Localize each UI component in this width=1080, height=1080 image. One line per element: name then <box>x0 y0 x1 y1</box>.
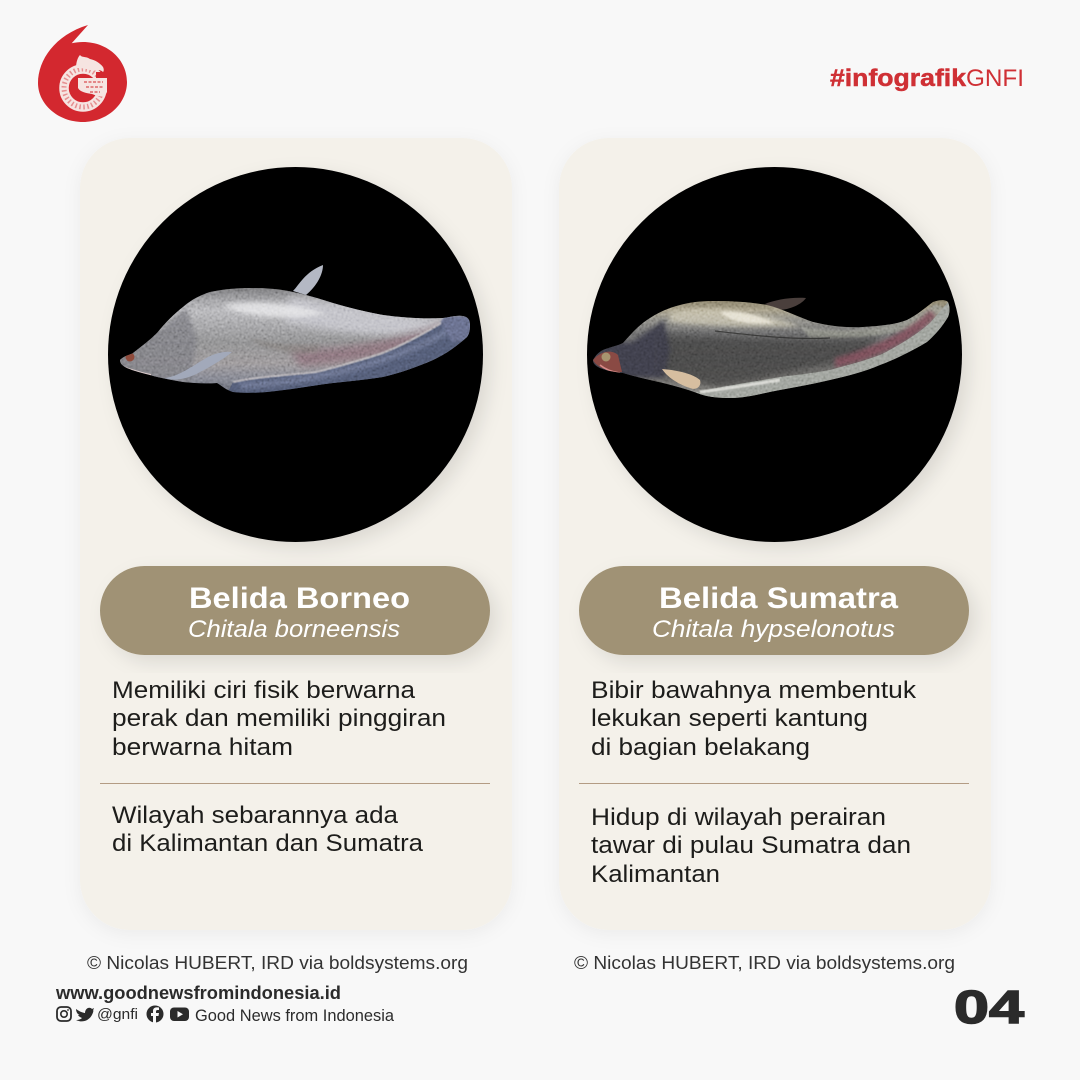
card background left <box>80 138 512 930</box>
icon: twitter <box>76 1008 94 1021</box>
description text: berwarna hitam <box>112 734 293 761</box>
hashtag: #infografikGNFI: #infografik <box>830 65 967 92</box>
description text: di bagian belakang <box>591 734 810 761</box>
panel: Belida Sumatra <box>559 138 991 930</box>
icon: youtube <box>170 1008 189 1021</box>
habitat text <box>591 804 911 888</box>
name pill <box>579 566 969 655</box>
description text <box>112 677 446 761</box>
scientific name: Chitala borneensis <box>188 616 400 643</box>
name heading: Belida Borneo <box>189 582 410 615</box>
description text: Memiliki ciri fisik berwarna <box>112 677 416 704</box>
habitat text: tawar di pulau Sumatra dan <box>591 832 911 859</box>
icon: instagram <box>57 1007 71 1021</box>
logo: GNFI red six emblem <box>38 25 127 122</box>
panel: Belida Borneo <box>80 138 512 930</box>
name pill <box>100 566 490 655</box>
distribution text: di Kalimantan dan Sumatra <box>112 830 424 857</box>
photo: Chitala borneensis on black circle <box>108 167 483 542</box>
habitat text: Kalimantan <box>591 861 720 888</box>
distribution text <box>112 802 424 857</box>
page number: 04 <box>954 981 1025 1033</box>
description text: Bibir bawahnya membentuk <box>591 677 917 704</box>
card background right <box>559 138 991 930</box>
description text: lekukan seperti kantung <box>591 705 868 732</box>
hashtag: #infografikGNFI: GNFI <box>966 65 1024 92</box>
distribution text: Wilayah sebarannya ada <box>112 802 399 829</box>
page name: Good News from Indonesia <box>195 1006 395 1025</box>
photo credit right: © Nicolas HUBERT, IRD via boldsystems.org <box>574 953 955 973</box>
description text: perak dan memiliki pinggiran <box>112 705 446 732</box>
description text <box>591 677 917 761</box>
website: www.goodnewsfromindonesia.id <box>55 983 341 1003</box>
habitat text: Hidup di wilayah perairan <box>591 804 886 831</box>
footer: website and social media <box>55 983 395 1025</box>
icon: facebook <box>146 1006 164 1023</box>
handle: @gnfi <box>97 1006 138 1023</box>
name heading: Belida Sumatra <box>659 582 898 615</box>
hashtag: #infografikGNFI <box>830 65 1024 92</box>
photo credit left: © Nicolas HUBERT, IRD via boldsystems.org <box>87 953 468 973</box>
scientific name: Chitala hypselonotus <box>652 616 895 643</box>
photo: Chitala hypselonotus on black circle <box>585 167 962 542</box>
